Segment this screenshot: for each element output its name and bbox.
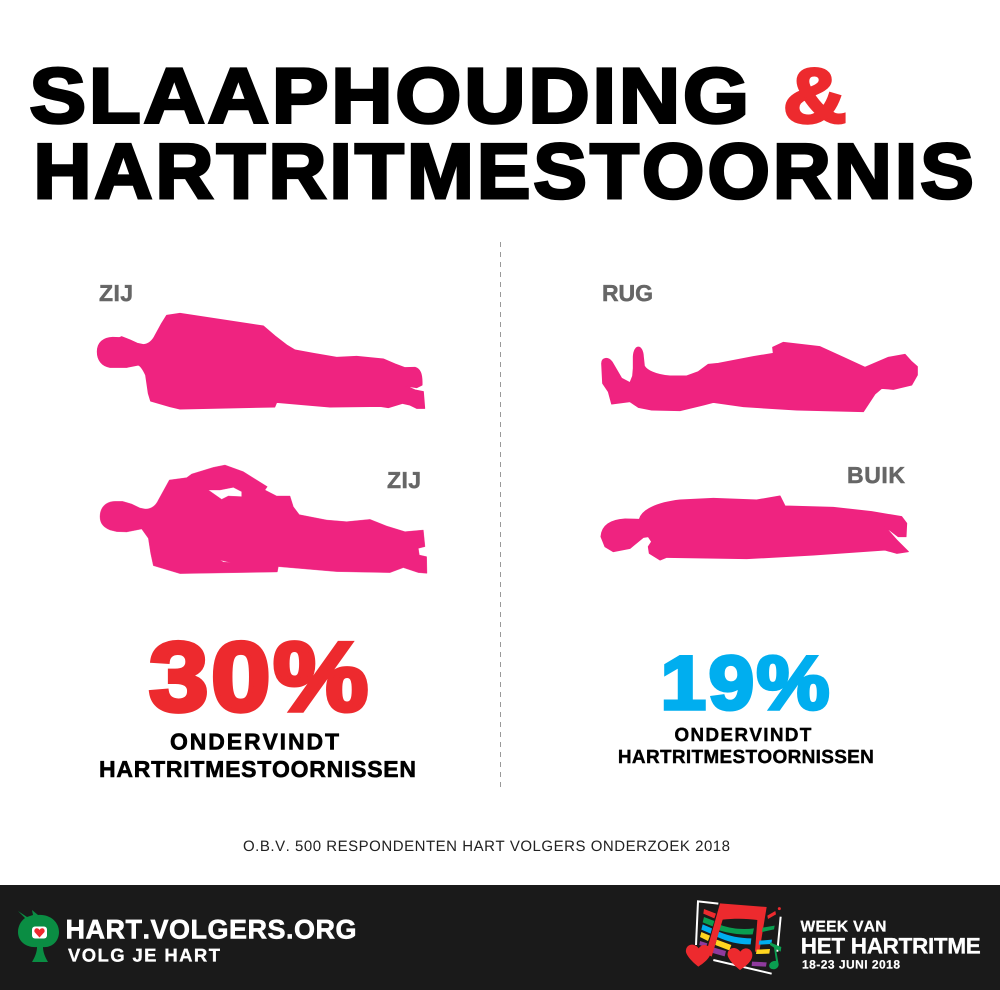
label: zij 1: ZIJ — [99, 280, 133, 306]
stat: 19 percent: ONDERVINDT — [674, 725, 812, 746]
stat: 30 percent: ONDERVINDT — [170, 728, 339, 754]
icon: heart tree logo — [18, 910, 59, 962]
footnote: O.B.V. 500 RESPONDENTEN HART VOLGERS ONDERZOEK 2018 — [243, 838, 730, 855]
stat: 19 percent: 19% — [660, 641, 832, 726]
logo text: hart.volgers.org: HART.VOLGERS.ORG — [66, 914, 356, 944]
stat: 30 percent: 30% — [149, 622, 371, 732]
title: & — [783, 52, 847, 140]
stat: 19 percent: HARTRITMESTOORNISSEN — [618, 747, 874, 768]
logo text: hart.volgers.org: VOLG JE HART — [68, 944, 221, 965]
silhouette: side sleeper 2 — [100, 465, 427, 574]
logo text: hart.volgers.org — [66, 914, 356, 965]
logo text: week van het hartritme: HET HARTRITME — [801, 933, 981, 958]
stat: 19 percent — [618, 641, 874, 768]
label: zij 2: ZIJ — [387, 467, 421, 493]
label: buik: BUIK — [847, 462, 905, 488]
footer bar — [0, 885, 1000, 990]
title: SLAAPHOUDING — [30, 52, 752, 140]
logo text: week van het hartritme: 18-23 JUNI 2018 — [802, 957, 900, 971]
logo text: week van het hartritme: WEEK VAN — [800, 919, 886, 936]
stat: 30 percent: HARTRITMESTOORNISSEN — [99, 756, 416, 782]
stat: 30 percent — [99, 622, 416, 782]
silhouette: stomach sleeper — [601, 496, 908, 560]
title — [30, 52, 977, 215]
icon: music note hearts logo — [686, 901, 781, 974]
label: rug: RUG — [602, 280, 653, 306]
silhouette: back sleeper — [602, 342, 917, 412]
silhouette: side sleeper 1 — [97, 313, 425, 409]
title: HARTRITMESTOORNIS — [34, 127, 977, 215]
logo text: week van het hartritme — [800, 919, 981, 971]
